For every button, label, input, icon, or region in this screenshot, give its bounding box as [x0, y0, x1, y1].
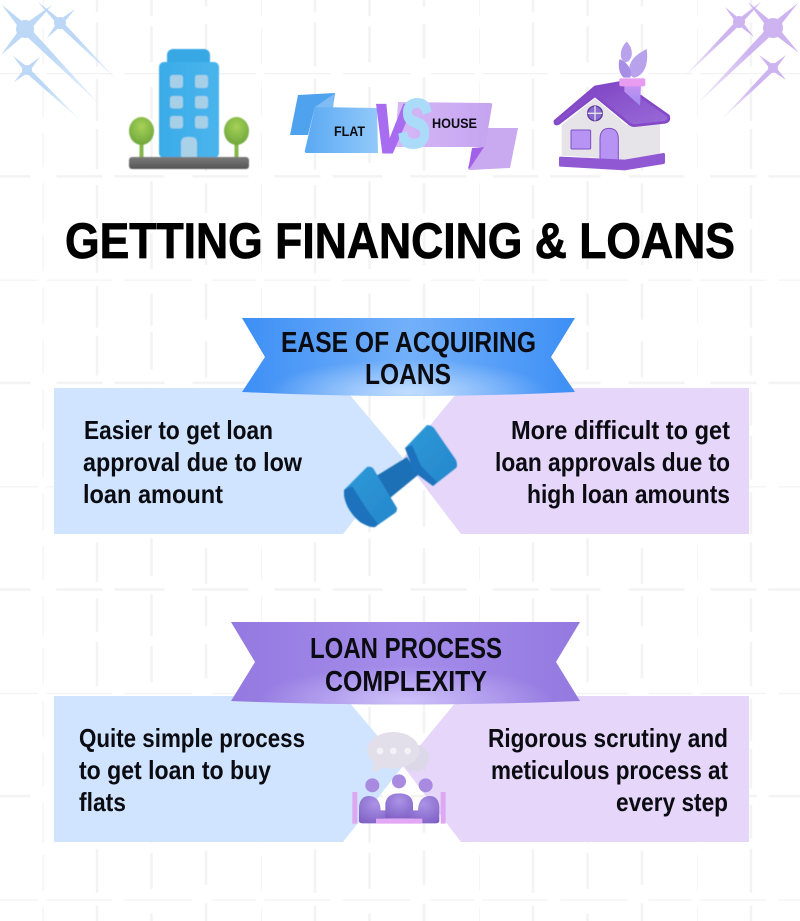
text: house loan process: meticulous process at [491, 755, 728, 785]
left ribbon [305, 107, 378, 153]
left ribbon fold [315, 94, 334, 108]
label: FLAT: FLAT [334, 124, 366, 139]
tree right [224, 117, 249, 158]
icon: meeting with speech bubbles [352, 732, 446, 824]
tower body [159, 62, 219, 158]
panel: flat, left [54, 388, 403, 534]
square window [571, 130, 591, 149]
ribbon heading: ease of acquiring loans: LOANS [365, 359, 451, 391]
door [181, 137, 197, 158]
tower top [167, 49, 210, 69]
ribbon heading: ease of acquiring loans: EASE OF ACQUIRING [281, 327, 536, 359]
windows [170, 75, 208, 128]
speech bubbles [367, 732, 429, 773]
text: house loan process [488, 723, 728, 817]
walls [562, 98, 660, 160]
text: house loan process: Rigorous scrutiny and [488, 723, 728, 753]
letter S: S [399, 87, 431, 162]
ribbon heading: ease of acquiring loans [242, 318, 575, 396]
ribbon heading: loan process complexity [231, 622, 580, 704]
text: flat loan process [79, 723, 305, 817]
letter V: V [373, 91, 412, 166]
ribbon heading: loan process complexity: COMPLEXITY [325, 666, 487, 698]
text: flat loan approval: Easier to get loan [84, 415, 273, 445]
text: house loan approval: high loan amounts [527, 479, 730, 509]
ground base [129, 157, 249, 169]
decorative blue sparkles, top left [1, 2, 117, 120]
ribbon heading: loan process complexity: LOAN PROCESS [310, 633, 502, 665]
section: ease of acquiring loans [54, 318, 749, 534]
left ribbon tab [290, 93, 335, 135]
icon: apartment building with trees [129, 49, 249, 169]
text: flat loan process: to get loan to buy [79, 755, 271, 785]
text: house loan approval: loan approvals due to [495, 447, 730, 477]
title: GETTING FINANCING & LOANS [65, 213, 735, 269]
right ribbon [395, 102, 492, 147]
text: house loan approval [495, 415, 730, 509]
panel: house, right [403, 696, 749, 842]
decorative purple sparkles, top right [683, 2, 799, 119]
text: flat loan approval [83, 415, 303, 509]
text: flat loan process: flats [79, 787, 126, 817]
text: house loan approval: More difficult to get [511, 415, 730, 445]
right ribbon fold [468, 147, 484, 169]
chimney [619, 78, 645, 106]
icon: dumbbell [344, 425, 457, 527]
heads [365, 774, 433, 792]
label: HOUSE: HOUSE [432, 116, 477, 131]
panel: house, right [403, 388, 749, 534]
text: flat loan approval: approval due to low [83, 447, 303, 477]
plant leaves [619, 42, 647, 78]
tree left [129, 117, 154, 158]
side bars [352, 792, 446, 824]
right ribbon tab [468, 128, 518, 170]
text: flat loan process: Quite simple process [79, 723, 305, 753]
icon: flat vs house banner [290, 87, 518, 170]
text: house loan process: every step [616, 787, 728, 817]
people [359, 793, 439, 823]
door [600, 128, 618, 160]
section: loan process complexity [54, 622, 749, 842]
roof [555, 82, 669, 126]
base [560, 154, 664, 169]
text: flat loan approval: loan amount [83, 479, 223, 509]
panel: flat, left [54, 696, 403, 842]
round window [588, 106, 602, 121]
table [376, 819, 422, 824]
icon: house with plant [555, 42, 669, 169]
